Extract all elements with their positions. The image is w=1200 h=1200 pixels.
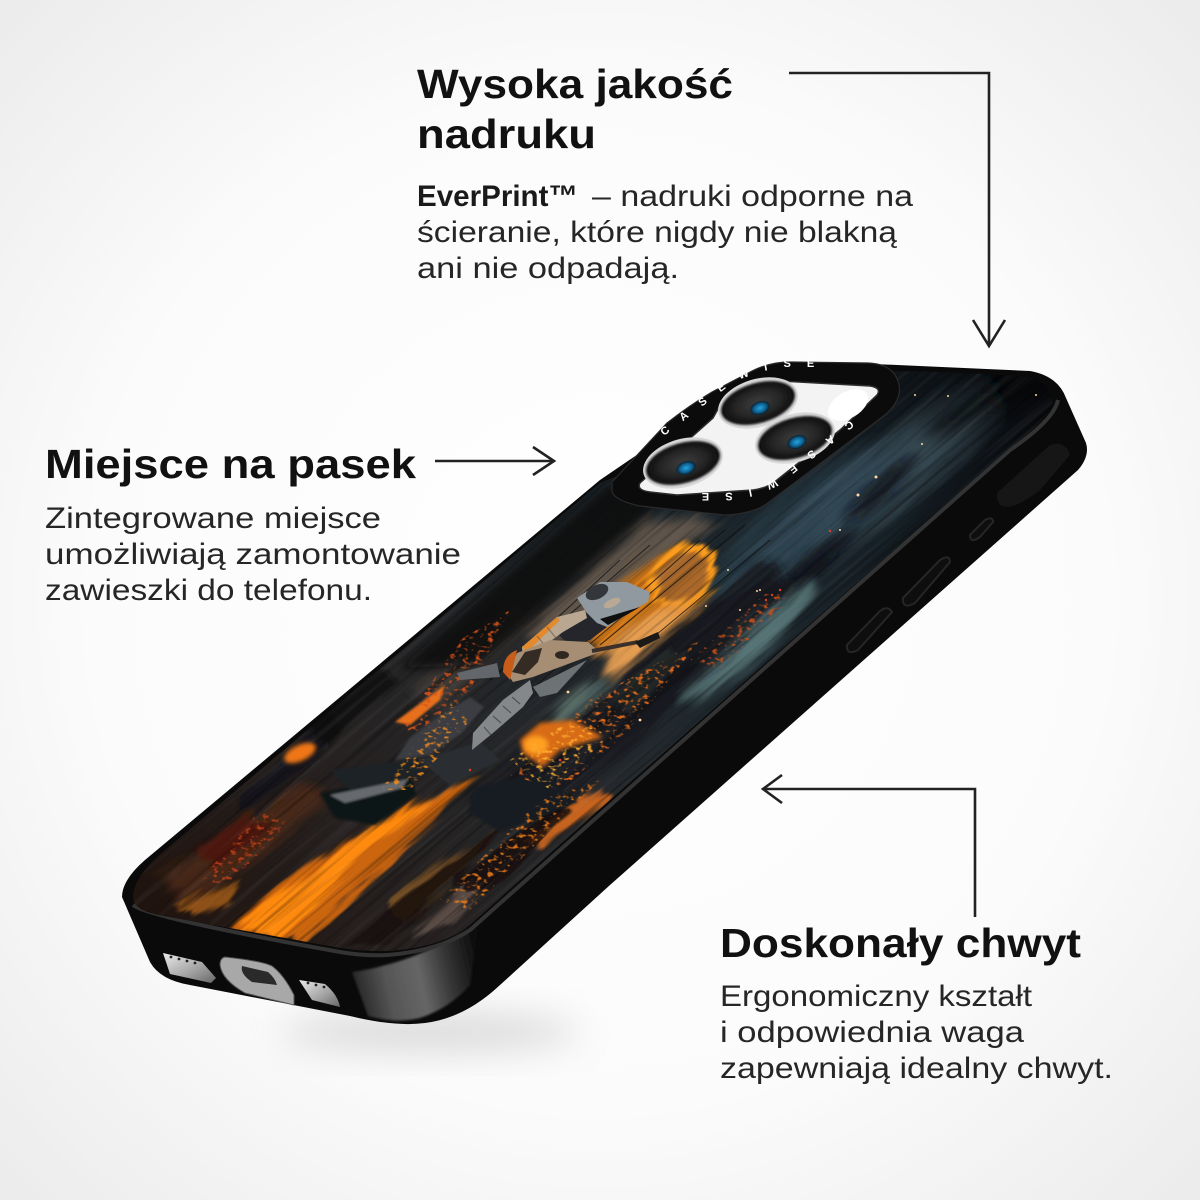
charging port xyxy=(220,957,294,1005)
brown reflection xyxy=(386,829,496,922)
text: print quality description: EverPrint™ xyxy=(417,180,578,213)
fire patches xyxy=(281,685,603,767)
lens top xyxy=(712,369,804,437)
left speaker xyxy=(163,953,216,983)
orange lake reflection bright xyxy=(237,800,437,937)
lens left xyxy=(637,429,729,497)
bottom gloss reflection xyxy=(352,925,478,1021)
paint streaks xyxy=(174,399,982,942)
text: print quality description: ani nie odpadają. xyxy=(417,252,679,285)
side buttons xyxy=(847,444,1070,652)
legs xyxy=(472,680,533,750)
white camera opening xyxy=(639,380,878,495)
camera island xyxy=(612,361,900,516)
arrow: strap slot xyxy=(435,447,554,475)
scratch lines around moon xyxy=(490,525,770,700)
phone case xyxy=(122,361,1087,1024)
forest patch xyxy=(610,650,690,715)
ember speckle xyxy=(200,590,790,910)
arm xyxy=(522,610,587,651)
orange shore right xyxy=(525,785,612,850)
heading: print quality xyxy=(417,61,733,157)
text: print quality description: – nadruki odporne na xyxy=(592,180,913,213)
painted scene xyxy=(156,378,1020,946)
right speaker xyxy=(299,980,340,1007)
brand text bottom: CASEWISE xyxy=(702,422,853,500)
text: strap slot description: Zintegrowane miejsce xyxy=(45,502,381,535)
moon ring xyxy=(644,538,720,610)
light streaks xyxy=(134,372,1052,950)
text: grip description: Ergonomiczny kształt xyxy=(720,980,1033,1013)
brown sky lower xyxy=(412,616,544,710)
tree reflection four xyxy=(300,670,400,745)
red haze left xyxy=(195,815,270,870)
heading: strap slot: Miejsce na pasek xyxy=(45,441,416,487)
grey-brown corner xyxy=(410,880,490,930)
dark forest band xyxy=(470,560,800,820)
heading: print quality: nadruku xyxy=(417,111,596,157)
rocks xyxy=(320,697,578,832)
astronaut with guitar xyxy=(457,581,660,750)
rust haze left xyxy=(160,780,330,905)
text: strap slot description: zawieszki do telefonu. xyxy=(45,574,372,607)
tree reflection one xyxy=(355,825,505,945)
moon disc xyxy=(651,549,711,605)
case body xyxy=(122,362,1087,1024)
text: grip description: zapewniają idealny chwyt. xyxy=(720,1052,1113,1085)
heading: print quality: Wysoka jakość xyxy=(417,61,733,107)
text: grip description: i odpowiednia waga xyxy=(720,1016,1024,1049)
dark upper-left strip xyxy=(400,480,660,668)
sparks xyxy=(567,394,1037,721)
red sparks xyxy=(469,530,831,771)
brown sky xyxy=(520,518,720,650)
pale glow under helmet xyxy=(600,600,700,680)
text: strap slot description xyxy=(45,502,461,607)
arrow: print quality xyxy=(789,73,1005,346)
tree reflection three xyxy=(238,728,330,820)
text: strap slot description: umożliwiają zamontowanie xyxy=(45,538,461,571)
arrow: grip xyxy=(763,775,975,917)
helmet xyxy=(577,582,650,627)
amber corner xyxy=(175,880,240,915)
phone shadow xyxy=(280,1012,580,1052)
front rim xyxy=(133,400,1058,955)
tree reflection two xyxy=(452,807,574,894)
text: print quality description: ścieranie, które nigdy nie blakną xyxy=(417,216,897,249)
text: print quality description xyxy=(417,180,913,285)
heading: grip: Doskonały chwyt xyxy=(720,920,1081,966)
torso xyxy=(557,613,607,643)
moon glow xyxy=(583,543,722,660)
guitar xyxy=(507,640,600,682)
artwork screen xyxy=(133,371,1052,951)
smoke teal xyxy=(824,376,1007,556)
text: grip description xyxy=(720,980,1113,1085)
lens right xyxy=(749,404,841,472)
brand text top: CASEWISE xyxy=(661,361,814,434)
orange lake reflection wide xyxy=(225,775,480,945)
